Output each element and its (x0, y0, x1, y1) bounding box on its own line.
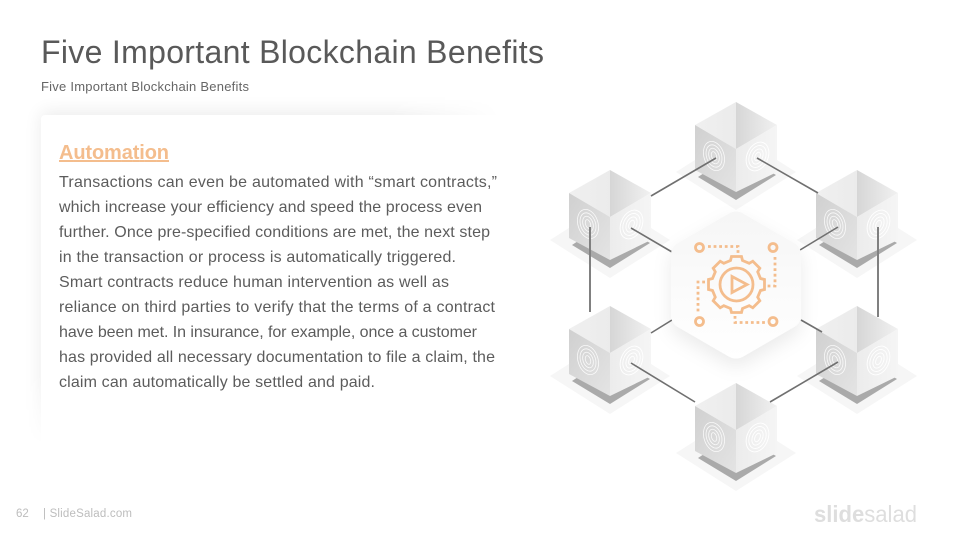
panel: automation text card (40, 110, 496, 390)
cube: lower right (797, 306, 917, 414)
card heading: Automation (59, 142, 169, 164)
cube: upper right (797, 170, 917, 278)
footer: page number: 62 (16, 508, 29, 520)
icon: gear with play button and circuit (696, 244, 777, 326)
footer: site name: | SlideSalad.com (43, 508, 132, 520)
card body text: in the transaction or process is automatically triggered. (59, 249, 456, 266)
card body text: further. Once pre-specified conditions are met, the next step (59, 224, 490, 241)
cube: top (676, 102, 796, 210)
card body text: have been met. In insurance, for example, once a customer (59, 324, 478, 341)
card body text: which increase your efficiency and speed the process even (58, 199, 482, 216)
logo: slidesalad: slidesalad (814, 501, 917, 527)
connecting lines (590, 158, 878, 402)
card body text: reliance on third parties to verify that the terms of a contract (59, 299, 496, 316)
card body text: claim can automatically be settled and paid. (59, 374, 375, 391)
card body text: Transactions can even be automated with “smart contracts,” (59, 174, 497, 191)
card body text: Smart contracts reduce human intervention as well as (59, 274, 449, 291)
card body text: has provided all necessary documentation to file a claim, the (59, 349, 495, 366)
card body text (58, 174, 497, 391)
cube: upper left (550, 170, 670, 278)
cube: lower left (550, 306, 670, 414)
title: Five Important Blockchain Benefits (41, 34, 544, 70)
cube: bottom (676, 383, 796, 491)
centre hexagon (671, 212, 801, 358)
blockchain hexagon diagram (550, 102, 917, 491)
subtitle: Five Important Blockchain Benefits (41, 79, 250, 94)
